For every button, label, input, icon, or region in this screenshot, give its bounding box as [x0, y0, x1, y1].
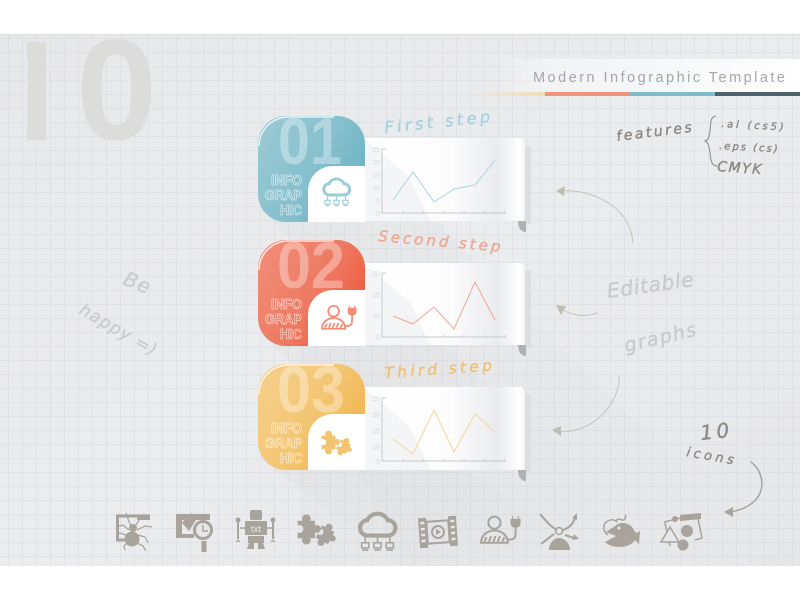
step 1 paper with line chart: 10 — [372, 185, 380, 192]
icon: film strip — [418, 516, 458, 548]
step 2 badge: GRAP — [265, 312, 302, 328]
icon: cloud network — [360, 514, 395, 550]
icon: person with plug — [322, 305, 356, 329]
step 3 paper with line chart: 20 — [372, 412, 380, 419]
large background number 10 — [27, 39, 151, 140]
arrow: editable to chart 1 — [556, 186, 633, 243]
10 icons note: 10 — [699, 418, 734, 445]
icon: angler fish — [604, 515, 640, 547]
features note: features — [616, 120, 695, 145]
step 1 badge: HIC — [280, 203, 302, 219]
step 2 badge — [258, 228, 365, 346]
step 3 badge: HIC — [280, 451, 302, 467]
editable graphs note: Editable — [605, 267, 696, 303]
icon: person with plug — [481, 516, 520, 543]
step 1 paper with line chart: 15 — [372, 173, 380, 180]
arrow: editable to chart 3 — [552, 375, 619, 436]
features note: CMYK — [717, 159, 764, 178]
ribbon colour bar — [470, 92, 800, 96]
icon: robot with txt screen: txt — [251, 524, 261, 535]
step 1 paper with line chart: 0 — [376, 211, 380, 218]
10 icons note — [685, 418, 738, 469]
step 1 paper with line chart: 25 — [372, 147, 380, 154]
step 1 paper with line chart: 5 — [376, 198, 380, 205]
icon: cloud network — [324, 179, 350, 206]
step 3 heading: Third step — [384, 356, 496, 382]
step 3 paper with line chart: 25 — [372, 396, 380, 403]
panel: step 2 — [258, 227, 531, 356]
icon: robot with txt screen — [236, 510, 276, 549]
step 3 badge — [258, 352, 365, 470]
arrow: to icon row — [724, 462, 762, 517]
step 1 paper with line chart — [360, 138, 531, 232]
icon: puzzle pieces — [322, 431, 356, 459]
icon: crossing arrows — [540, 513, 579, 550]
be happy note: Be — [120, 266, 155, 299]
features note: .eps (cs) — [719, 141, 780, 155]
step 2 badge: 02 — [277, 228, 345, 302]
step 1 badge: 01 — [278, 104, 342, 178]
icon: puzzle pieces — [298, 514, 341, 551]
step 3 paper with line chart — [360, 387, 531, 481]
step 1 badge: INFO — [271, 173, 302, 189]
step 2 paper with line chart: 20 — [372, 271, 380, 278]
step 3 badge: INFO — [271, 421, 302, 437]
title ribbon — [500, 59, 800, 92]
panel: step 1 — [258, 104, 531, 232]
arrow: editable to chart 2 — [556, 305, 598, 315]
10 icons note: icons — [685, 445, 738, 469]
features note: .ai (cs5) — [721, 119, 787, 133]
step 2 paper with line chart: 5 — [376, 335, 380, 342]
step 3 paper with line chart: 10 — [372, 444, 380, 451]
panel: step 3 — [258, 352, 531, 481]
title text: Modern Infographic Template — [533, 70, 785, 86]
editable graphs note — [605, 267, 700, 357]
step 1 badge — [258, 104, 365, 222]
step 2 paper with line chart: 10 — [372, 313, 380, 320]
step 2 heading: Second step — [378, 227, 504, 256]
be happy note — [76, 266, 161, 361]
step 2 paper with line chart — [360, 263, 531, 356]
step 1 badge: GRAP — [265, 188, 302, 204]
long shadows — [262, 150, 700, 566]
be happy note: happy =) — [76, 300, 161, 361]
icon: spider on window — [117, 513, 152, 551]
step 2 badge: HIC — [280, 327, 302, 343]
icon row — [117, 510, 702, 552]
step 3 paper with line chart: 15 — [372, 428, 380, 435]
editable graphs note: graphs — [622, 319, 700, 357]
step 1 heading: First step — [383, 107, 494, 137]
large background number 10: 0 — [76, 11, 157, 170]
icon: alert and tools — [661, 513, 702, 550]
step 2 paper with line chart: 15 — [372, 292, 380, 299]
step 3 paper with line chart: 5 — [376, 459, 380, 466]
step 3 badge: 03 — [277, 352, 345, 426]
step 1 paper with line chart: 20 — [372, 160, 380, 167]
icon: bug under magnifier — [176, 513, 212, 552]
features note — [616, 116, 787, 178]
step 2 badge: INFO — [271, 297, 302, 313]
step 3 badge: GRAP — [265, 436, 302, 452]
